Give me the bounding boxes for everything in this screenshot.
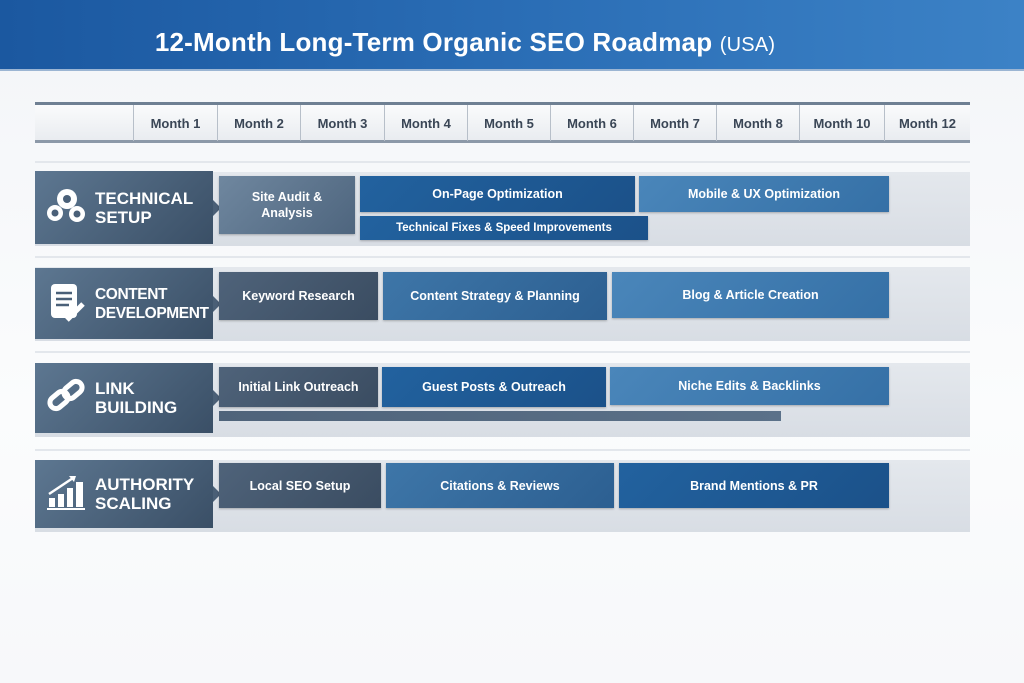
label: technical setup bbox=[35, 171, 213, 244]
task: mobile bbox=[639, 176, 889, 212]
label: technical setup: TECHNICAL bbox=[95, 188, 193, 208]
task: technical fixes bbox=[360, 216, 648, 240]
task: niche edits: Niche Edits & Backlinks bbox=[678, 379, 821, 393]
title: 12-Month Long-Term Organic SEO Roadmap (USA) bbox=[155, 27, 775, 57]
task: content strategy bbox=[383, 272, 607, 320]
label: content bbox=[35, 268, 213, 339]
task: on-page bbox=[360, 176, 635, 212]
progress bar bbox=[219, 411, 781, 421]
task: local seo: Local SEO Setup bbox=[250, 478, 350, 492]
panel: link building bbox=[35, 363, 970, 437]
task: guest posts: Guest Posts & Outreach bbox=[422, 380, 566, 394]
label: content: CONTENT bbox=[95, 286, 167, 302]
header banner bbox=[0, 0, 1024, 71]
month header bbox=[35, 102, 970, 143]
task: site audit: Site Audit & bbox=[252, 190, 322, 204]
month header: Month 7 bbox=[650, 116, 700, 131]
task: content strategy: Content Strategy & Planning bbox=[410, 289, 580, 303]
task: mobile: Mobile & UX Optimization bbox=[688, 187, 840, 201]
task: local seo bbox=[219, 463, 381, 508]
month header: Month 8 bbox=[733, 116, 783, 131]
label: authority: SCALING bbox=[95, 494, 172, 513]
label: authority bbox=[35, 460, 213, 528]
panel: content development bbox=[35, 267, 970, 341]
task: keyword research bbox=[219, 272, 378, 320]
month header: Month 6 bbox=[567, 116, 617, 131]
label: technical setup: SETUP bbox=[95, 208, 152, 226]
task: keyword research: Keyword Research bbox=[242, 289, 355, 303]
panel: authority scaling bbox=[35, 460, 970, 532]
label: link bbox=[35, 363, 213, 433]
task: blog: Blog & Article Creation bbox=[682, 288, 819, 302]
label: content: DEVELOPMENT bbox=[95, 304, 209, 322]
month header: Month 3 bbox=[318, 116, 367, 131]
task: brand mentions: Brand Mentions & PR bbox=[690, 478, 818, 492]
month header: Month 10 bbox=[813, 116, 871, 131]
month header: Month 2 bbox=[234, 116, 284, 131]
task: citations: Citations & Reviews bbox=[440, 478, 560, 492]
task: technical fixes: Technical Fixes & Speed Improvements bbox=[396, 222, 612, 234]
task: guest posts bbox=[382, 367, 606, 407]
task: niche edits bbox=[610, 367, 889, 405]
task: citations bbox=[386, 463, 614, 508]
task: site audit: Analysis bbox=[261, 206, 313, 220]
task: brand mentions bbox=[619, 463, 889, 508]
label: link: BUILDING bbox=[95, 398, 177, 417]
task: site audit bbox=[219, 176, 355, 234]
task: initial outreach bbox=[219, 367, 378, 407]
task: on-page: On-Page Optimization bbox=[432, 187, 563, 201]
month header: Month 1 bbox=[151, 116, 200, 131]
month header: Month 12 bbox=[899, 116, 956, 131]
month header: Month 5 bbox=[484, 116, 534, 131]
task: initial outreach: Initial Link Outreach bbox=[238, 380, 359, 394]
month header: Month 4 bbox=[401, 116, 451, 131]
label: link: LINK bbox=[95, 379, 135, 398]
panel: technical setup bbox=[35, 172, 970, 246]
task: blog bbox=[612, 272, 889, 318]
label: authority: AUTHORITY bbox=[95, 475, 194, 494]
